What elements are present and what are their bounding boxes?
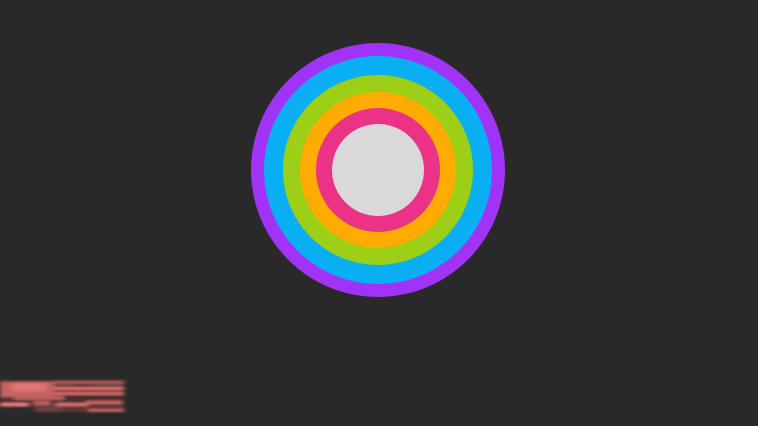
- ring: orange: [300, 92, 456, 248]
- blurred watermark text: [0, 380, 124, 412]
- ring: pink: [316, 108, 440, 232]
- ring: blue: [264, 56, 492, 284]
- center disc: [332, 124, 424, 216]
- concentric ring chart: [251, 43, 505, 297]
- ring: green: [283, 75, 473, 265]
- ring: purple: [251, 43, 505, 297]
